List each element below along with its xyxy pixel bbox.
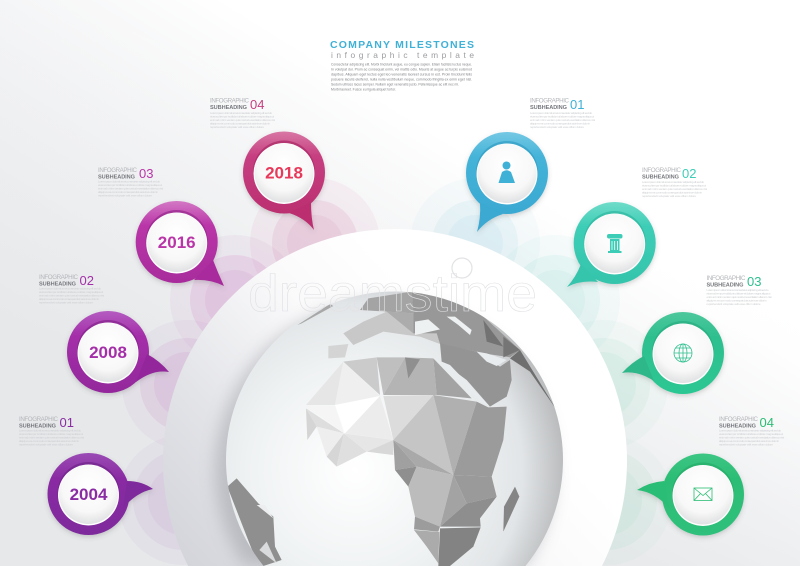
- label: left 04: [210, 97, 275, 129]
- intro paragraph: In volutpat dui. Proin ac consequat enim, vel mattis odio. Mauris at augue ac turpis euismod: [331, 66, 472, 72]
- pin: 2018: [243, 132, 325, 230]
- icon: person: [498, 162, 515, 183]
- label: right 04: aliquip ex ea commodo consequat duis aute irure dolor in: [719, 439, 779, 443]
- label: left 04: aliquip ex ea commodo consequat duis aute irure dolor in: [210, 122, 270, 126]
- label: left 02: 02: [80, 273, 94, 288]
- pin: 2016: 2016: [158, 233, 196, 252]
- pin: 2018: 2018: [265, 164, 303, 182]
- label: left 03: SUBHEADING: [98, 174, 135, 180]
- label: left 04: eiusmod tempor incididunt ut labore et dolore magna aliqua ut: [210, 114, 274, 118]
- intro paragraph: dapibus. Aliquam eget lectus eget leo venenatis laoreet cursus in est. Proin tincidunt felis: [331, 72, 472, 76]
- low-poly world map: [227, 292, 557, 566]
- label: right 02: reprehenderit voluptate velit esse cillum dolore: [642, 194, 696, 198]
- concentric circles: blue and green: [410, 178, 672, 565]
- label: right 02: aliquip ex ea commodo consequat duis aute irure dolor in: [642, 190, 702, 194]
- label: right 04: INFOGRAPHIC: [719, 416, 759, 423]
- label: right 03: reprehenderit voluptate velit esse cillum dolore: [706, 302, 761, 306]
- pin: person: [466, 132, 548, 232]
- label: left 04: INFOGRAPHIC: [210, 98, 250, 104]
- label: left 01: SUBHEADING: [19, 424, 56, 430]
- concentric circles: pink and purple: [118, 178, 380, 565]
- label: right 01: aliquip ex ea commodo consequat duis aute irure dolor in: [530, 122, 590, 126]
- label: left 01: 01: [60, 415, 74, 430]
- label: left 01: reprehenderit voluptate velit esse cillum dolore: [19, 442, 73, 446]
- label: right 04: reprehenderit voluptate velit esse cillum dolore: [719, 442, 773, 446]
- icon: globe: [674, 344, 692, 362]
- label: right 03: SUBHEADING: [706, 282, 744, 288]
- intro paragraph: Morbi laoreet. Fusce eu ligula aliquet tortor.: [331, 86, 396, 92]
- globe shadow: [215, 300, 555, 566]
- label: left 03: 03: [139, 166, 153, 181]
- madagascar: [503, 487, 519, 532]
- label: left 01: INFOGRAPHIC: [19, 416, 59, 423]
- label: right 02: enim ad minim veniam quis nostrud exercitation ullamco nisi: [642, 187, 707, 191]
- label: left 02: SUBHEADING: [39, 282, 76, 288]
- pin: 2004: 2004: [70, 485, 108, 504]
- label: right 01: eiusmod tempor incididunt ut labore et dolore magna aliqua ut: [530, 114, 594, 118]
- label: left 04: enim ad minim veniam quis nostrud exercitation ullamco nisi: [210, 118, 275, 122]
- label: right 03: [706, 274, 772, 306]
- label: left 04: Lorem ipsum dolor sit amet consectetur adipiscing elit sed do: [210, 111, 272, 115]
- label: left 04: 04: [250, 97, 264, 112]
- intro paragraph: Consectetur adipiscing elit. Morbi tincidunt augue, eu congue sapien. Etiam facilisis luctus neque.: [331, 62, 472, 66]
- pin: 2016: [136, 201, 224, 286]
- label: left 02: [39, 273, 104, 304]
- label: right 02: eiusmod tempor incididunt ut labore et dolore magna aliqua ut: [642, 184, 706, 188]
- label: left 01: [19, 415, 84, 446]
- label: left 04: SUBHEADING: [210, 105, 247, 111]
- label: right 02: [642, 166, 707, 198]
- label: right 02: SUBHEADING: [642, 174, 679, 180]
- pin: 2008: [67, 311, 169, 393]
- label: left 01: eiusmod tempor incididunt ut labore et dolore magna aliqua ut: [19, 432, 83, 436]
- label: left 02: enim ad minim veniam quis nostrud exercitation ullamco nisi: [39, 294, 104, 298]
- label: left 03: aliquip ex ea commodo consequat duis aute irure dolor in: [98, 190, 158, 194]
- label: left 01: aliquip ex ea commodo consequat duis aute irure dolor in: [19, 439, 79, 443]
- pin: column: [567, 202, 656, 287]
- europe and asia: [328, 344, 348, 358]
- label: right 03: INFOGRAPHIC: [706, 275, 746, 282]
- label: left 03: Lorem ipsum dolor sit amet consectetur adipiscing elit sed do: [98, 180, 160, 184]
- label: right 02: Lorem ipsum dolor sit amet consectetur adipiscing elit sed do: [642, 180, 704, 184]
- label: right 03: enim ad minim veniam quis nostrud exercitation ullamco nisi: [706, 295, 772, 299]
- label: right 03: aliquip ex ea commodo consequat duis aute irure dolor in: [706, 298, 767, 302]
- label: left 04: reprehenderit voluptate velit esse cillum dolore: [210, 125, 264, 129]
- label: left 01: enim ad minim veniam quis nostrud exercitation ullamco nisi: [19, 436, 84, 440]
- south america: [227, 478, 282, 566]
- pin: 2004: [48, 453, 153, 535]
- pin: 2008: 2008: [89, 343, 127, 362]
- pin: globe: [622, 312, 724, 394]
- label: left 01: Lorem ipsum dolor sit amet consectetur adipiscing elit sed do: [19, 428, 81, 432]
- label: right 01: SUBHEADING: [530, 105, 567, 111]
- label: right 01: enim ad minim veniam quis nostrud exercitation ullamco nisi: [530, 118, 595, 122]
- icon: column: [607, 234, 622, 253]
- intro paragraph: posuere iaculis eleifend, nulla nulla vestibulum neque, commodo fringilla ex enim eget nisl.: [331, 76, 472, 82]
- label: right 01: 01: [570, 97, 584, 112]
- label: left 03: [98, 166, 163, 198]
- label: right 04: Lorem ipsum dolor sit amet consectetur adipiscing elit sed do: [719, 428, 781, 432]
- label: right 03: 03: [747, 274, 761, 289]
- label: left 02: eiusmod tempor incididunt ut labore et dolore magna aliqua ut: [39, 290, 103, 294]
- label: left 03: eiusmod tempor incididunt ut labore et dolore magna aliqua ut: [98, 183, 162, 187]
- label: right 03: Lorem ipsum dolor sit amet consectetur adipiscing elit sed do: [706, 288, 769, 292]
- label: left 02: Lorem ipsum dolor sit amet consectetur adipiscing elit sed do: [39, 286, 101, 290]
- label: left 02: INFOGRAPHIC: [39, 274, 79, 281]
- label: right 04: [719, 415, 784, 446]
- subtitle: infographic template: [331, 50, 474, 60]
- intro paragraph: [331, 62, 472, 92]
- label: right 01: [530, 97, 595, 129]
- label: right 04: eiusmod tempor incididunt ut labore et dolore magna aliqua ut: [719, 432, 783, 436]
- icon: envelope: [694, 488, 712, 500]
- label: right 01: Lorem ipsum dolor sit amet consectetur adipiscing elit sed do: [530, 111, 592, 115]
- title block: [330, 39, 474, 92]
- label: right 01: INFOGRAPHIC: [530, 98, 570, 104]
- label: left 02: aliquip ex ea commodo consequat duis aute irure dolor in: [39, 297, 99, 301]
- label: right 04: 04: [760, 415, 774, 430]
- pin: envelope: [637, 454, 744, 536]
- label: right 04: SUBHEADING: [719, 424, 756, 430]
- label: left 03: enim ad minim veniam quis nostrud exercitation ullamco nisi: [98, 186, 163, 190]
- label: right 01: reprehenderit voluptate velit esse cillum dolore: [530, 125, 584, 129]
- globe: [226, 292, 563, 566]
- intro paragraph: Sedum ultrices lacus semper. Nullam eget venenatis justo. Pellentesque ac elit nec mi.: [331, 82, 459, 86]
- label: right 02: INFOGRAPHIC: [642, 167, 682, 174]
- label: left 03: reprehenderit voluptate velit esse cillum dolore: [98, 194, 152, 198]
- large white disc: [163, 229, 627, 566]
- label: left 03: INFOGRAPHIC: [98, 167, 138, 174]
- label: right 04: enim ad minim veniam quis nostrud exercitation ullamco nisi: [719, 436, 784, 440]
- watermark: dreamstime: [248, 265, 537, 323]
- label: left 02: reprehenderit voluptate velit esse cillum dolore: [39, 300, 93, 304]
- label: right 03: eiusmod tempor incididunt ut labore et dolore magna aliqua ut: [706, 292, 771, 296]
- title: COMPANY MILESTONES: [330, 39, 474, 51]
- label: right 02: 02: [682, 166, 696, 181]
